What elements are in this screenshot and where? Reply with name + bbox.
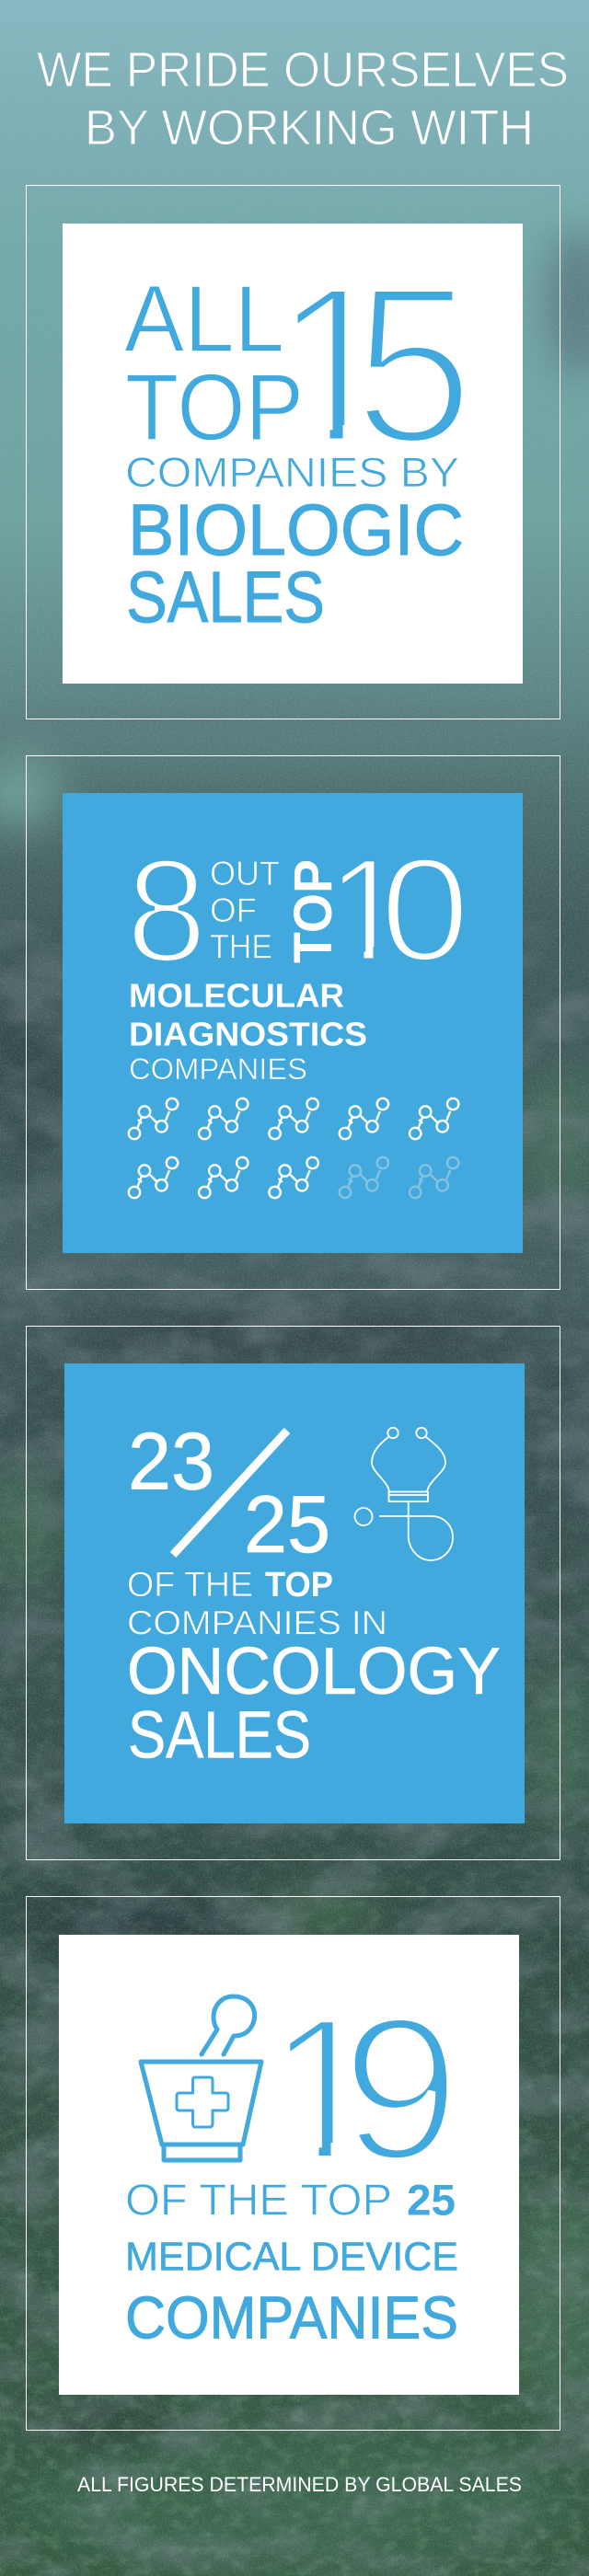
heading: all top xyxy=(124,266,304,460)
text: companies by: COMPANIES BY xyxy=(125,449,459,496)
text: molecular diagnostics: DIAGNOSTICS xyxy=(129,1016,367,1052)
title xyxy=(37,42,569,155)
number: 19 xyxy=(267,1975,460,2203)
card xyxy=(64,1363,525,1823)
text: biologic sales xyxy=(126,489,464,638)
text: out of the: OF xyxy=(210,891,257,929)
text: out of the: THE xyxy=(210,927,272,966)
text: of the top 25: OF THE TOP xyxy=(125,2177,392,2225)
text: of the top: TOP xyxy=(265,1566,333,1604)
title: WE PRIDE OURSELVES xyxy=(37,42,569,98)
number: 10: 1 xyxy=(326,827,408,992)
panel: oncology sales xyxy=(26,1327,560,1860)
card xyxy=(63,793,523,1253)
panel frame xyxy=(26,1897,560,2431)
text: rotated top: TOP xyxy=(283,859,343,963)
icon: mortar and pestle xyxy=(141,1996,261,2160)
text: biologic sales: SALES xyxy=(126,556,325,638)
text: oncology sales xyxy=(127,1635,501,1772)
slash xyxy=(173,1431,287,1555)
number: 19: 9 xyxy=(341,1975,460,2203)
text: companies in: COMPANIES IN xyxy=(127,1604,387,1641)
panel: medical device xyxy=(26,1897,560,2431)
text: oncology sales: SALES xyxy=(128,1698,311,1772)
number: 10: 0 xyxy=(380,827,470,992)
text: companies: COMPANIES xyxy=(129,1052,307,1086)
text: out of the xyxy=(210,855,280,966)
text: of the top xyxy=(127,1566,333,1604)
number: 25: 25 xyxy=(244,1478,330,1570)
text: of the top 25: 25 xyxy=(407,2175,456,2225)
text: oncology sales: ONCOLOGY xyxy=(127,1635,501,1708)
number: 15: 1 xyxy=(272,238,398,490)
text: companies: COMPANIES xyxy=(125,2283,458,2352)
icons: eight of ten molecules xyxy=(129,1098,458,1198)
panel frame xyxy=(26,1327,560,1860)
text: out of the: OUT xyxy=(210,855,280,892)
title: BY WORKING WITH xyxy=(85,100,534,155)
card xyxy=(59,1935,519,2395)
heading: all top: ALL xyxy=(124,266,284,372)
card xyxy=(63,224,523,684)
text: molecular diagnostics xyxy=(129,977,367,1052)
icon: stethoscope xyxy=(355,1428,453,1560)
number: 15 xyxy=(272,238,474,490)
panel: biologic sales xyxy=(26,186,560,719)
number: 19: 1 xyxy=(267,1975,380,2203)
text: medical device: MEDICAL DEVICE xyxy=(125,2234,458,2280)
panel: molecular diagnostics xyxy=(26,756,560,1290)
panel frame xyxy=(26,186,560,719)
number: 8: 8 xyxy=(126,828,207,993)
number: 15: 5 xyxy=(353,238,474,490)
heading: all top: TOP xyxy=(125,354,304,460)
text: biologic sales: BIOLOGIC xyxy=(128,489,464,570)
panel frame xyxy=(26,756,560,1290)
number: 23: 23 xyxy=(128,1415,214,1507)
footer note: ALL FIGURES DETERMINED BY GLOBAL SALES xyxy=(77,2473,522,2496)
text: of the top: OF THE xyxy=(127,1566,253,1604)
text: molecular diagnostics: MOLECULAR xyxy=(129,977,344,1014)
number: 10 xyxy=(326,827,470,992)
